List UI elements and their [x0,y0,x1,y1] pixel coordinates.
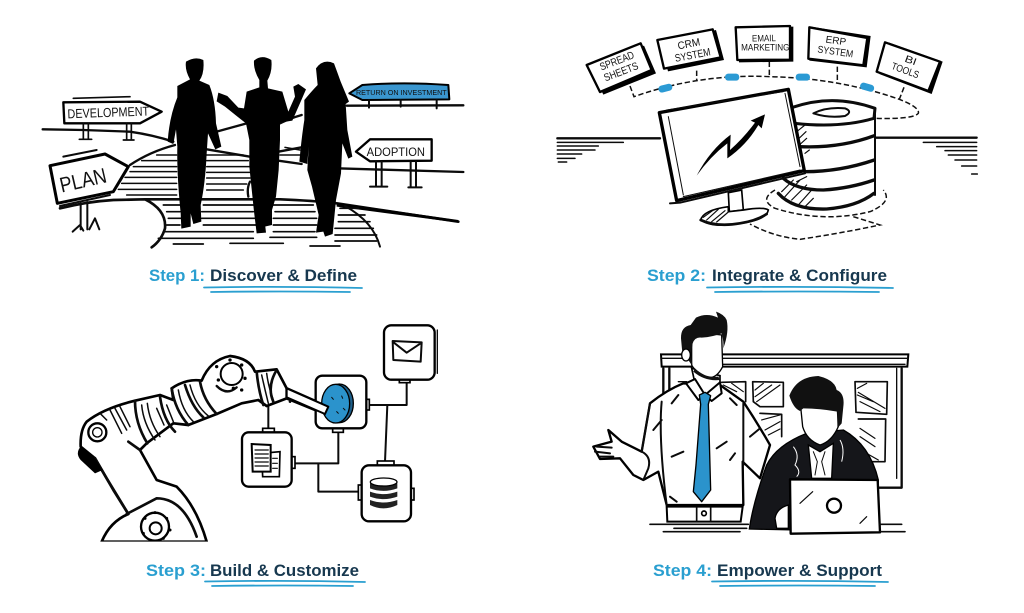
heading: step 4 [653,562,888,586]
card: spreadsheets: SHEETS [602,60,640,84]
card: crm system [657,29,724,71]
card: erp system: ERP [825,35,847,48]
sign: adoption [356,139,432,187]
module: email [384,325,437,383]
illustration: robot arm and connected modules [78,325,437,543]
connector pills [658,74,875,93]
seated colleague [749,376,880,534]
card: spreadsheets: SPREAD [598,49,636,73]
panel: step 2 integrate and configure [557,26,977,292]
card: erp system: SYSTEM [817,44,854,60]
heading: step 2: Integrate & Configure [712,267,887,285]
panel: step 1 discover and define [43,57,463,292]
module: dial [287,376,369,432]
illustration: people walking on roads with signposts [43,57,463,247]
sign: plan: PLAN [57,164,109,198]
card: email marketing [736,26,793,62]
monitor stand [701,190,768,225]
illustration: presenter with colleague at laptop [593,312,908,534]
heading: step 2: Step 2: [647,267,706,285]
sign: plan [50,150,128,232]
desk lines [650,524,905,532]
blue tie [693,392,711,502]
heading: step 1 [149,267,362,292]
heading: step 2 [647,267,893,292]
dashed connection arc [630,62,918,118]
card: crm system: SYSTEM [674,46,712,65]
database cylinder [773,100,875,209]
card: bi tools: TOOLS [890,61,921,81]
sign: development [63,97,162,140]
heading: step 1: Discover & Define [210,267,357,285]
whiteboard [661,354,908,488]
dashed cable loops [750,190,886,239]
heading: step 4: Empower & Support [717,562,883,580]
person 3 silhouette with long hair [299,62,352,237]
panel: step 4 empower and support [593,312,908,586]
module: documents [242,428,295,487]
sign: return on investment: RETURN ON INVESTMENT [356,88,447,97]
heading: step 1: Step 1: [149,267,205,285]
panel: step 3 build and customize [78,325,437,586]
card: bi tools: BI [903,54,918,68]
presenter [593,312,770,522]
card: email marketing: MARKETING [741,43,789,53]
card: crm system: CRM [677,36,701,52]
monitor with growth arrow [659,89,805,203]
card: spreadsheets [587,43,656,95]
sign: return on investment [349,83,449,108]
card: erp system [808,27,871,67]
person 2 silhouette with raised hands [217,57,306,233]
heading: step 3: Step 3: [146,562,206,580]
sign: development: DEVELOPMENT [67,103,149,121]
person 1 silhouette [168,58,221,229]
robot arm [78,356,328,543]
heading: step 3: Build & Customize [210,562,359,580]
heading: step 4: Step 4: [653,562,712,580]
illustration: connected systems, monitor and database [557,26,977,239]
module: database [358,461,414,521]
sign: adoption: ADOPTION [367,145,425,159]
card: email marketing: EMAIL [752,33,776,44]
heading: step 3 [146,562,365,586]
card: bi tools [877,42,943,94]
